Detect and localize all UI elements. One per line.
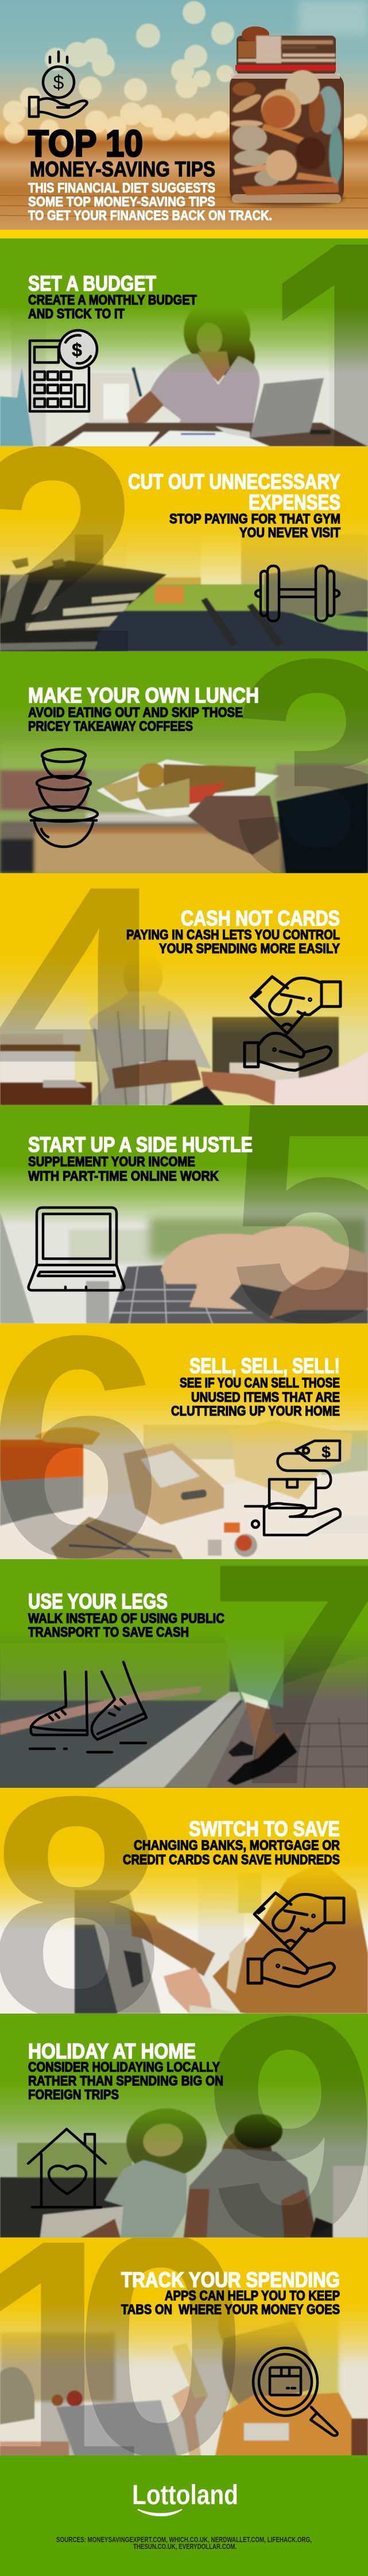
photo: gym with treadmills bbox=[0, 534, 368, 651]
panel: tip 8 switch to save bbox=[0, 1730, 368, 2084]
description bbox=[171, 1375, 340, 1419]
green fade bbox=[0, 1559, 368, 1703]
description: AND STICK TO IT bbox=[28, 306, 125, 322]
intro text: THIS FINANCIAL DIET SUGGESTS bbox=[28, 180, 215, 196]
title: MONEY-SAVING TIPS bbox=[30, 157, 215, 181]
heading: START UP A SIDE HUSTLE bbox=[28, 1133, 253, 1156]
description: APPS CAN HELP YOU TO KEEP bbox=[165, 2288, 340, 2304]
description: CHANGING BANKS, MORTGAGE OR bbox=[134, 1838, 340, 1853]
description: STOP PAYING FOR THAT GYM bbox=[169, 511, 340, 527]
description: UNUSED ITEMS THAT ARE bbox=[191, 1390, 340, 1405]
green fade bbox=[0, 2014, 368, 2149]
photo: hands typing on laptop bbox=[0, 1212, 368, 1324]
panel: tip 5 start up a side hustle bbox=[0, 1105, 368, 1324]
icon: walking shoes bbox=[30, 1662, 146, 1752]
icon: price tag, parcel and hand bbox=[245, 1441, 340, 1535]
icon: laptop bbox=[29, 1208, 124, 1290]
green fade bbox=[0, 238, 368, 373]
description bbox=[28, 1156, 219, 1181]
logo: Lottoland: Lottoland bbox=[132, 2480, 238, 2511]
icon: magnifier over parcel bbox=[253, 2348, 338, 2436]
description: SUPPLEMENT YOUR INCOME bbox=[28, 1154, 195, 1170]
description bbox=[28, 1611, 224, 1640]
icon: calculator and coin bbox=[30, 330, 97, 411]
photo: walking feet on road and cobbles bbox=[0, 1632, 368, 1788]
panel: tip 6 sell sell sell bbox=[0, 1324, 368, 1559]
heading: MAKE YOUR OWN LUNCH bbox=[28, 684, 259, 707]
photo: woman with phone and credit card bbox=[0, 2286, 368, 2456]
panel: tip 9 holiday at home bbox=[0, 1950, 368, 2304]
number 10 second digit: 0 bbox=[73, 2168, 249, 2521]
description: AVOID EATING OUT AND SKIP THOSE bbox=[28, 705, 243, 720]
hero panel bbox=[0, 0, 368, 230]
panel: tip 10 track your spending bbox=[0, 2168, 368, 2556]
green fade bbox=[0, 1105, 368, 1226]
icon: hands exchanging cash bbox=[248, 1893, 344, 1987]
heading: SWITCH TO SAVE bbox=[189, 1817, 340, 1841]
heading: SET A BUDGET bbox=[28, 272, 156, 295]
yellow fade bbox=[0, 873, 368, 1034]
yellow fade bbox=[0, 2238, 368, 2367]
description: CLUTTERING UP YOUR HOME bbox=[171, 1403, 340, 1419]
panel: footer bbox=[0, 2455, 368, 2576]
heading: USE YOUR LEGS bbox=[28, 1590, 168, 1613]
description: CREATE A MONTHLY BUDGET bbox=[28, 292, 197, 308]
description bbox=[123, 1838, 340, 1868]
panel: tip 1 set a budget bbox=[0, 238, 368, 446]
description: TRANSPORT TO SAVE CASH bbox=[28, 1625, 189, 1640]
title bbox=[28, 122, 215, 181]
panel: tip 3 make your own lunch bbox=[0, 651, 368, 873]
photo: plate of food held by hand bbox=[0, 741, 368, 873]
description: CONSIDER HOLIDAYING LOCALLY bbox=[28, 2060, 220, 2075]
description: PRICEY TAKEAWAY COFFEES bbox=[28, 719, 193, 734]
description bbox=[28, 707, 243, 731]
icon: hand receiving dollar coin: $ bbox=[53, 72, 64, 94]
icon: calculator and coin: $ bbox=[72, 340, 82, 360]
panel: tip 4 cash not cards bbox=[0, 873, 368, 1105]
description: YOU NEVER VISIT bbox=[239, 525, 340, 541]
description: WALK INSTEAD OF USING PUBLIC bbox=[28, 1611, 224, 1626]
photo: person using a cash machine bbox=[75, 1856, 368, 2014]
heading: EXPENSES bbox=[249, 491, 340, 514]
yellow divider stripe bbox=[0, 230, 368, 238]
sources bbox=[56, 2536, 312, 2551]
description bbox=[169, 514, 341, 538]
panel: tip 2 cut out unnecessary expenses bbox=[0, 446, 368, 651]
sources: THESUN.CO.UK, EVERYDOLLAR.COM. bbox=[133, 2543, 237, 2551]
panel: tip 7 use your legs bbox=[0, 1497, 368, 1850]
heading: HOLIDAY AT HOME bbox=[28, 2039, 196, 2063]
yellow fade bbox=[0, 1788, 368, 1931]
description: YOUR SPENDING MORE EASILY bbox=[159, 941, 340, 957]
green fade bbox=[0, 651, 368, 761]
photo: customer paying cash in cafe bbox=[0, 954, 368, 1105]
yellow fade bbox=[0, 1324, 368, 1450]
coin jar bbox=[230, 26, 344, 206]
title: TOP 10 bbox=[28, 122, 143, 164]
photo: packing items into cardboard box bbox=[0, 1420, 368, 1559]
description bbox=[28, 294, 197, 319]
photo: woman working at a laptop bbox=[0, 299, 368, 446]
heading bbox=[129, 473, 341, 510]
icon: house with heart bbox=[28, 2129, 106, 2207]
description: WITH PART-TIME ONLINE WORK bbox=[28, 1169, 219, 1184]
yellow fade bbox=[0, 446, 368, 584]
intro text bbox=[28, 180, 272, 223]
description bbox=[126, 930, 340, 954]
icon: price tag, parcel and hand: $ bbox=[321, 1443, 331, 1461]
description bbox=[28, 2060, 223, 2103]
description: FOREIGN TRIPS bbox=[28, 2087, 119, 2103]
hero photo: blurred lights and wooden table bbox=[0, 0, 368, 230]
icon: stacked food containers bbox=[30, 749, 98, 847]
description bbox=[121, 2288, 340, 2317]
icon: hands exchanging cash bbox=[245, 977, 340, 1070]
icon: barbell bbox=[255, 566, 339, 621]
description: RATHER THAN SPENDING BIG ON bbox=[28, 2073, 223, 2089]
heading: CASH NOT CARDS bbox=[181, 907, 340, 930]
intro text: TO GET YOUR FINANCES BACK ON TRACK. bbox=[28, 208, 272, 223]
icon: hand receiving dollar coin bbox=[29, 52, 87, 117]
photo: couple laughing on a sofa bbox=[0, 2108, 368, 2238]
intro text: SOME TOP MONEY-SAVING TIPS bbox=[28, 194, 215, 210]
